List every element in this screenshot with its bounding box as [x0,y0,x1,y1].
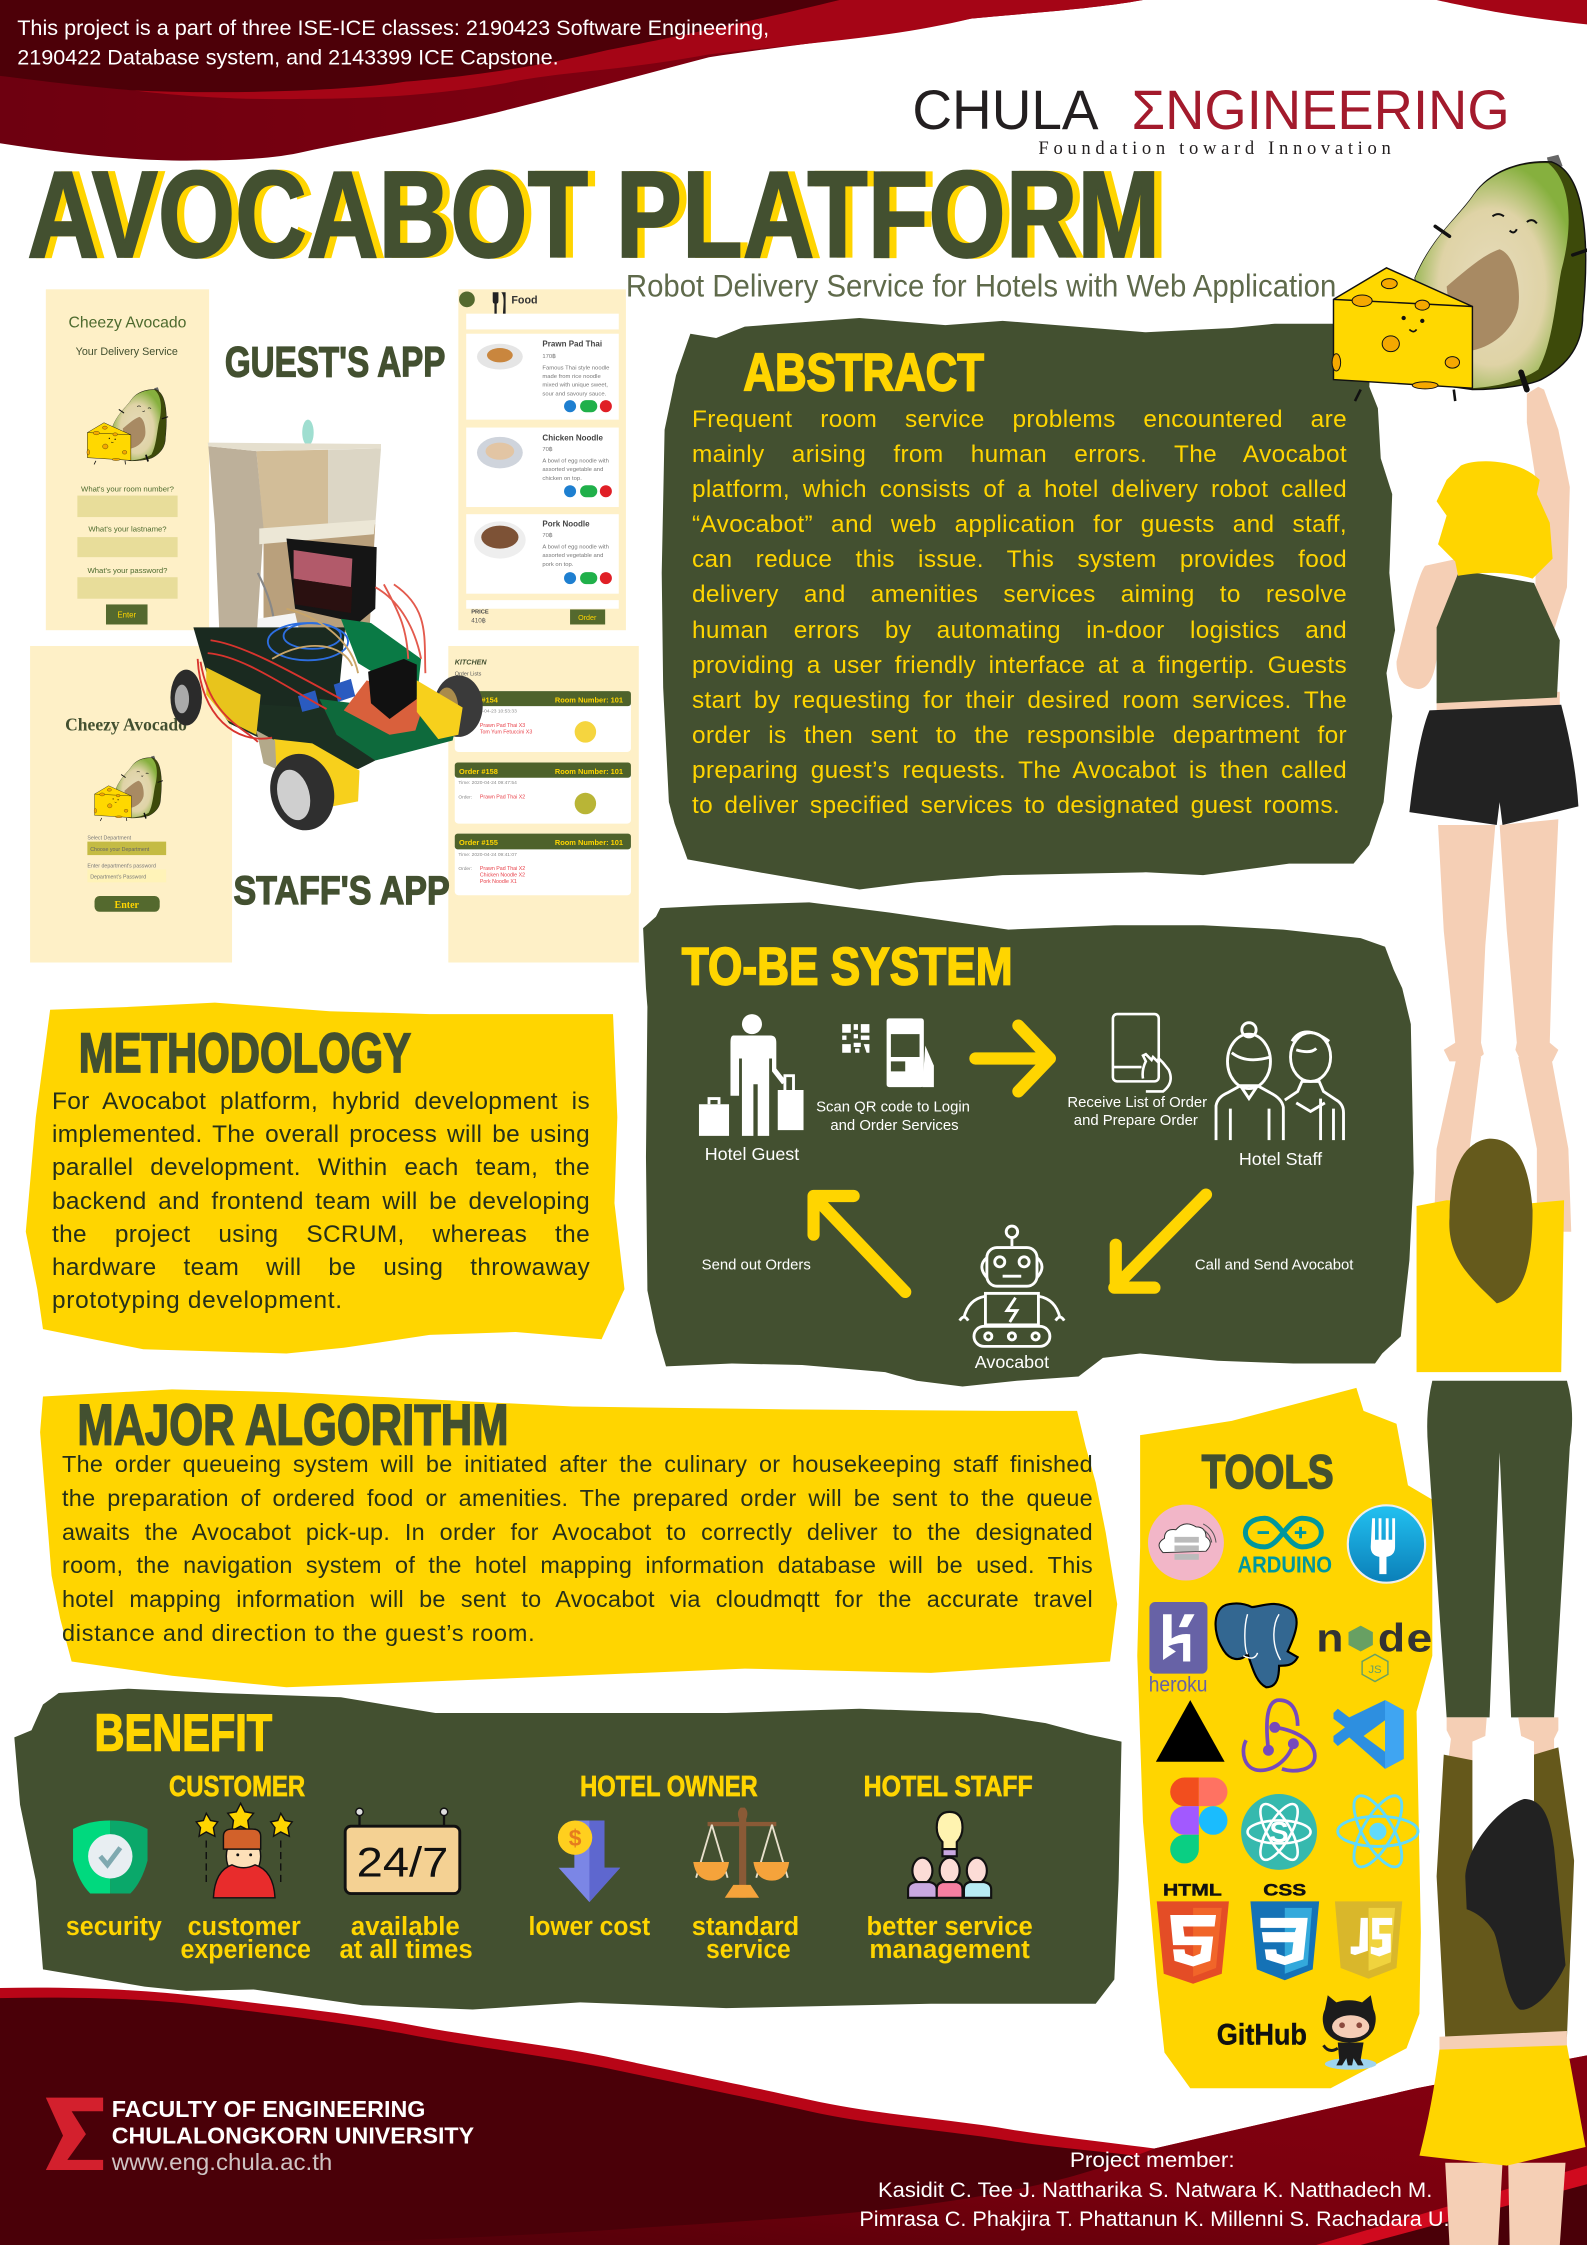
logo: faculty of engineering: www.eng.chula.ac.th [111,2149,332,2175]
text: abstract paragraph: start by requesting for their desired room services. The [692,687,1347,714]
screen: guest login: What's your password? [87,566,167,575]
heading: hotel owner: HOTEL OWNER [580,1771,758,1803]
logo: Chula Engineering: CHULA [912,78,1099,141]
screen: kitchen orders: Order Lists [455,671,482,677]
screen: kitchen orders: Prawn Pad Thai X3 [480,723,525,729]
logo: heroku [1149,1602,1207,1697]
icon: lower cost: $ [569,1825,582,1851]
labels: benefit items: customer [188,1913,301,1941]
screen: kitchen orders: Prawn Pad Thai X2 [480,866,525,872]
logo: triangle [1156,1700,1225,1762]
label: scan qr code [816,1099,970,1134]
text: abstract paragraph: order is then sent to the responsible department for [692,722,1347,749]
logo: node js: JS [1368,1664,1382,1676]
text: major algorithm paragraph: The order queueing system will be initiated after the culinary or housekeeping staff finished [62,1451,1093,1477]
diagram: to-be system [699,1014,1354,1372]
panel: tools [1137,1388,1432,2088]
screen: staff login: Enter department's password [87,864,156,870]
screen: staff login: Department's Password [90,875,146,881]
screen: staff login: Select Department [87,835,132,841]
panel: to-be system [643,902,1414,1386]
text: abstract paragraph: delivery and amenities services aiming to resolve [692,581,1347,608]
logo: faculty of engineering [46,2096,474,2175]
text: project members [859,2148,1449,2231]
icon: better service team [908,1812,991,1898]
text: major algorithm paragraph: awaits the Avocabot pick-up. In order for Avocabot to correctly deliver to the designated [62,1519,1093,1545]
text: project members: Kasidit C. Tee J. Nattharika S. Natwara K. Natthadech M. [878,2178,1432,2202]
photo: avocabot robot [170,420,483,838]
section: benefit contents [66,1771,1033,1964]
logo: css3 [1250,1882,1319,1980]
screen: kitchen orders: Order #154 [459,696,499,705]
text: abstract paragraph [692,406,1347,819]
arrow: staff to avocabot [1114,1195,1206,1288]
screen: guest login: Cheezy Avocado [69,314,187,331]
logo: css3: CSS [1263,1882,1306,1900]
text: methodology paragraph: the project using SCRUM, whereas the [52,1221,590,1248]
mascot: avocado and cheese [1332,155,1587,401]
screen: guest food menu: sour and savoury sauce. [542,391,607,397]
labels: benefit items: security [66,1913,162,1941]
note: project classes: 2190422 Database system, and 2143399 ICE Capstone. [17,45,559,69]
subtitle: Robot Delivery Service for Hotels with Web Application [626,267,1336,303]
label: hotel staff: Hotel Staff [1239,1149,1322,1169]
label: staff's app: STAFF'S APP [233,869,450,913]
screen: guest food menu: A bowl of egg noodle with [542,545,609,551]
label: scan qr code: and Order Services [830,1118,959,1134]
labels: benefit items: standard [692,1913,799,1941]
screen: guest food menu: assorted vegetable and [542,553,603,559]
panel: major algorithm [40,1389,1117,1687]
label: avocabot: Avocabot [975,1352,1049,1372]
screen: kitchen orders: Prawn Pad Thai X2 [480,795,525,801]
screen: kitchen orders: Order: [458,795,472,801]
text: major algorithm paragraph: the preparation of ordered food or amenities. The prepared order will be sent to the queue [62,1485,1093,1511]
text: major algorithm paragraph: room, the navigation system of the hotel mapping information database will be used. This [62,1552,1093,1578]
figure: girl with brown hair [1417,1057,1572,1762]
screen: guest food menu: 70฿ [542,446,553,453]
screen: guest food menu: made from rice noodle [542,374,601,380]
screen: kitchen orders: Order: [458,723,472,729]
screen: guest login: What's your lastname? [88,524,167,533]
background: bottom red wave [0,1988,1587,2245]
labels: benefit items [66,1913,1033,1964]
logo: javascript [1335,1901,1402,1979]
icon: available 24/7 [345,1808,460,1894]
heading: hotel staff: HOTEL STAFF [864,1771,1033,1803]
labels: benefit items: better service [867,1913,1033,1941]
text: abstract paragraph: preparing guest’s requests. The Avocabot is then called [692,757,1347,784]
labels: benefit items: at all times [339,1936,473,1964]
labels: benefit items: management [869,1936,1030,1964]
screen: kitchen orders: Order: [458,866,472,872]
section: tools logos [1148,1505,1432,2070]
logo: fastify fork [1348,1505,1425,1583]
heading: to-be system: TO-BE SYSTEM [682,938,1013,997]
screen: guest food menu: Famous Thai style noodle [542,366,609,372]
label: receive orders [1067,1095,1207,1129]
text: abstract paragraph: Frequent room service problems encountered are [692,406,1347,433]
screen: guest food menu: assorted vegetable and [542,467,603,473]
logo: faculty of engineering: FACULTY OF ENGINEERING [112,2096,425,2122]
labels: benefit items: lower cost [529,1913,651,1941]
panel: methodology [26,1003,624,1354]
text: project members: Project member: [1070,2148,1235,2172]
text: abstract paragraph: providing a user friendly interface at a fingertip. Guests [692,652,1347,679]
screen: kitchen orders [448,646,639,963]
icon: qr code and phone [842,1018,934,1087]
icon: hotel guest [699,1014,804,1136]
heading: major algorithm: MAJOR ALGORITHM [77,1393,508,1457]
heading: methodology: METHODOLOGY [79,1021,411,1084]
logo: figma [1170,1777,1227,1863]
logo: vs code [1333,1700,1404,1769]
text: abstract paragraph: to deliver specified services to designated guest rooms. [692,792,1340,819]
screen: kitchen orders: Order #155 [459,838,498,847]
text: methodology paragraph: parallel development. Within each team, the [52,1154,590,1181]
screen: guest food menu: 70฿ [542,532,553,539]
logo: github: GitHub [1217,2019,1307,2052]
screen: guest login [46,289,209,630]
arrow: avocabot to guest [814,1196,905,1292]
logo: Chula Engineering: ΣNGINEERING [1132,78,1510,141]
logo: cloudmqtt [1148,1505,1224,1581]
screen: guest food menu: 410฿ [471,617,486,624]
screen: guest login: Your Delivery Service [76,346,178,358]
screen: staff login: Enter [115,900,140,911]
text: methodology paragraph: implemented. The overall process will be using [52,1121,590,1148]
icon: avocabot robot [960,1226,1064,1346]
screen: staff login: Choose your Department [90,847,150,853]
heading: benefit: BENEFIT [95,1703,272,1761]
screen: guest food menu: 170฿ [542,353,556,360]
label: call and send: Call and Send Avocabot [1195,1258,1354,1274]
logo: faculty of engineering: CHULALONGKORN UNIVERSITY [112,2122,474,2148]
text: abstract paragraph: mainly arising from human errors. The Avocabot [692,441,1347,468]
text: methodology paragraph: prototyping development. [52,1287,343,1314]
heading: tools: TOOLS [1202,1446,1333,1499]
text: methodology paragraph: backend and frontend team will be developing [52,1188,590,1215]
screen: kitchen orders: Tom Yum Fetuccini X3 [480,729,532,735]
icon: standard scale [693,1808,789,1898]
title: AVOCABOT PLATFORM [27,146,1160,284]
text: methodology paragraph [52,1088,590,1314]
logo: html5 [1157,1882,1229,1984]
logo: node js: e [1407,1616,1432,1660]
text: major algorithm paragraph: hotel mapping information will be sent to Avocabot via cloudmqtt for the accurate travel [62,1586,1093,1612]
logo: Chula Engineering [912,78,1510,159]
logo: semantic atom [1241,1794,1317,1870]
icon: available 24/7: 24/7 [357,1838,448,1885]
figure: girl with blond hair holding mascot [1397,387,1578,1061]
screen: kitchen orders: KITCHEN [455,659,487,667]
screen: guest food menu: chicken on top. [542,476,582,482]
icon: customer experience [196,1803,292,1898]
background: top red wave [0,0,1587,161]
screen: guest food menu: Order [578,614,597,622]
logo: semantic atom: S [1270,1817,1289,1849]
icon: security shield [73,1820,148,1894]
screen: kitchen orders: Pork Noodle X1 [480,879,517,885]
label: receive orders: and Prepare Order [1074,1113,1198,1129]
title: AVOCABOT PLATFORM [34,146,1167,284]
labels: benefit items: experience [180,1936,311,1964]
logo: node js: n [1316,1616,1344,1660]
screen: kitchen orders: Room Number: 101 [555,767,623,776]
screen: guest food menu [458,289,626,630]
text: major algorithm paragraph [62,1451,1093,1646]
screen: guest food menu: A bowl of egg noodle with [542,459,609,465]
screen: staff login: Cheezy Avocado [65,714,187,734]
logo: github [1217,1995,1376,2070]
logo: Chula Engineering: Foundation toward Innovation [1038,138,1391,159]
logo: html5: HTML [1163,1882,1222,1900]
label: scan qr code: Scan QR code to Login [816,1099,970,1115]
screen: kitchen orders: Order #158 [459,767,498,776]
icon: lower cost [558,1820,620,1902]
screen: guest login: What's your room number? [81,484,174,493]
logo: redux [1243,1700,1315,1771]
text: abstract paragraph: platform, which consists of a hotel delivery robot called [692,476,1347,503]
logo: arduino: ARDUINO [1238,1552,1332,1578]
logo: arduino [1238,1518,1332,1578]
panel: abstract [662,318,1395,889]
screen: kitchen orders: Room Number: 101 [555,838,623,847]
logo: postgresql elephant [1216,1603,1298,1687]
label: receive orders: Receive List of Order [1067,1095,1207,1111]
icon: hotel staff [1216,1023,1344,1140]
figure: girl with black hair [1419,1747,1586,2245]
screen: guest food menu: pork on top. [542,562,574,568]
screen: kitchen orders: Time: 2020-04-24 09:41:07 [458,852,517,858]
screen: guest login: Enter [117,610,137,619]
screen: guest food menu: Chicken Noodle [542,433,604,442]
text: major algorithm paragraph: distance and direction to the guest’s room. [62,1620,535,1646]
arrow: guest to staff [975,1026,1050,1091]
logo: node js: d [1378,1616,1405,1660]
screen: staff login [30,646,232,963]
labels: benefit items: available [351,1913,460,1941]
screen: guest food menu: PRICE [471,610,489,616]
note: project classes [17,16,769,69]
note: project classes: This project is a part of three ISE-ICE classes: 2190423 Software Engineering, [17,16,769,40]
text: project members: Pimrasa C. Phakjira T. Phattanun K. Millenni S. Rachadara U. [859,2207,1449,2231]
heading: customer: CUSTOMER [169,1771,305,1803]
screen: guest food menu: Prawn Pad Thai [542,340,602,349]
screen: kitchen orders: Time: 2020-04-24 09:47:54 [458,780,517,786]
logo: react [1338,1789,1418,1874]
label: hotel guest: Hotel Guest [705,1144,799,1164]
panel: benefit [14,1689,1121,2010]
logo: heroku: heroku [1149,1673,1207,1697]
text: methodology paragraph: For Avocabot platform, hybrid development is [52,1088,590,1115]
icon: tablet and hand [1113,1014,1171,1091]
screen: kitchen orders: Time: 2020-04-23 10:53:33 [458,709,517,715]
screen: kitchen orders: Room Number: 101 [555,696,623,705]
text: abstract paragraph: can reduce this issue. This system provides food [692,546,1347,573]
screen: guest food menu: Pork Noodle [542,519,590,528]
screen: guest food menu: Food [511,295,538,307]
screen: kitchen orders: Chicken Noodle X2 [480,873,525,879]
text: methodology paragraph: hardware team will be using throwaway [52,1254,590,1281]
labels: benefit items: service [706,1936,791,1964]
label: send out orders: Send out Orders [702,1258,811,1274]
logo: node js [1316,1616,1432,1682]
text: abstract paragraph: human errors by automating in-door logistics and [692,617,1347,644]
screen: guest food menu: mixed with unique sweet, [542,383,608,389]
text: abstract paragraph: “Avocabot” and web application for guests and staff, [692,511,1347,538]
heading: abstract: ABSTRACT [743,343,984,402]
label: guest's app: GUEST'S APP [225,339,445,387]
